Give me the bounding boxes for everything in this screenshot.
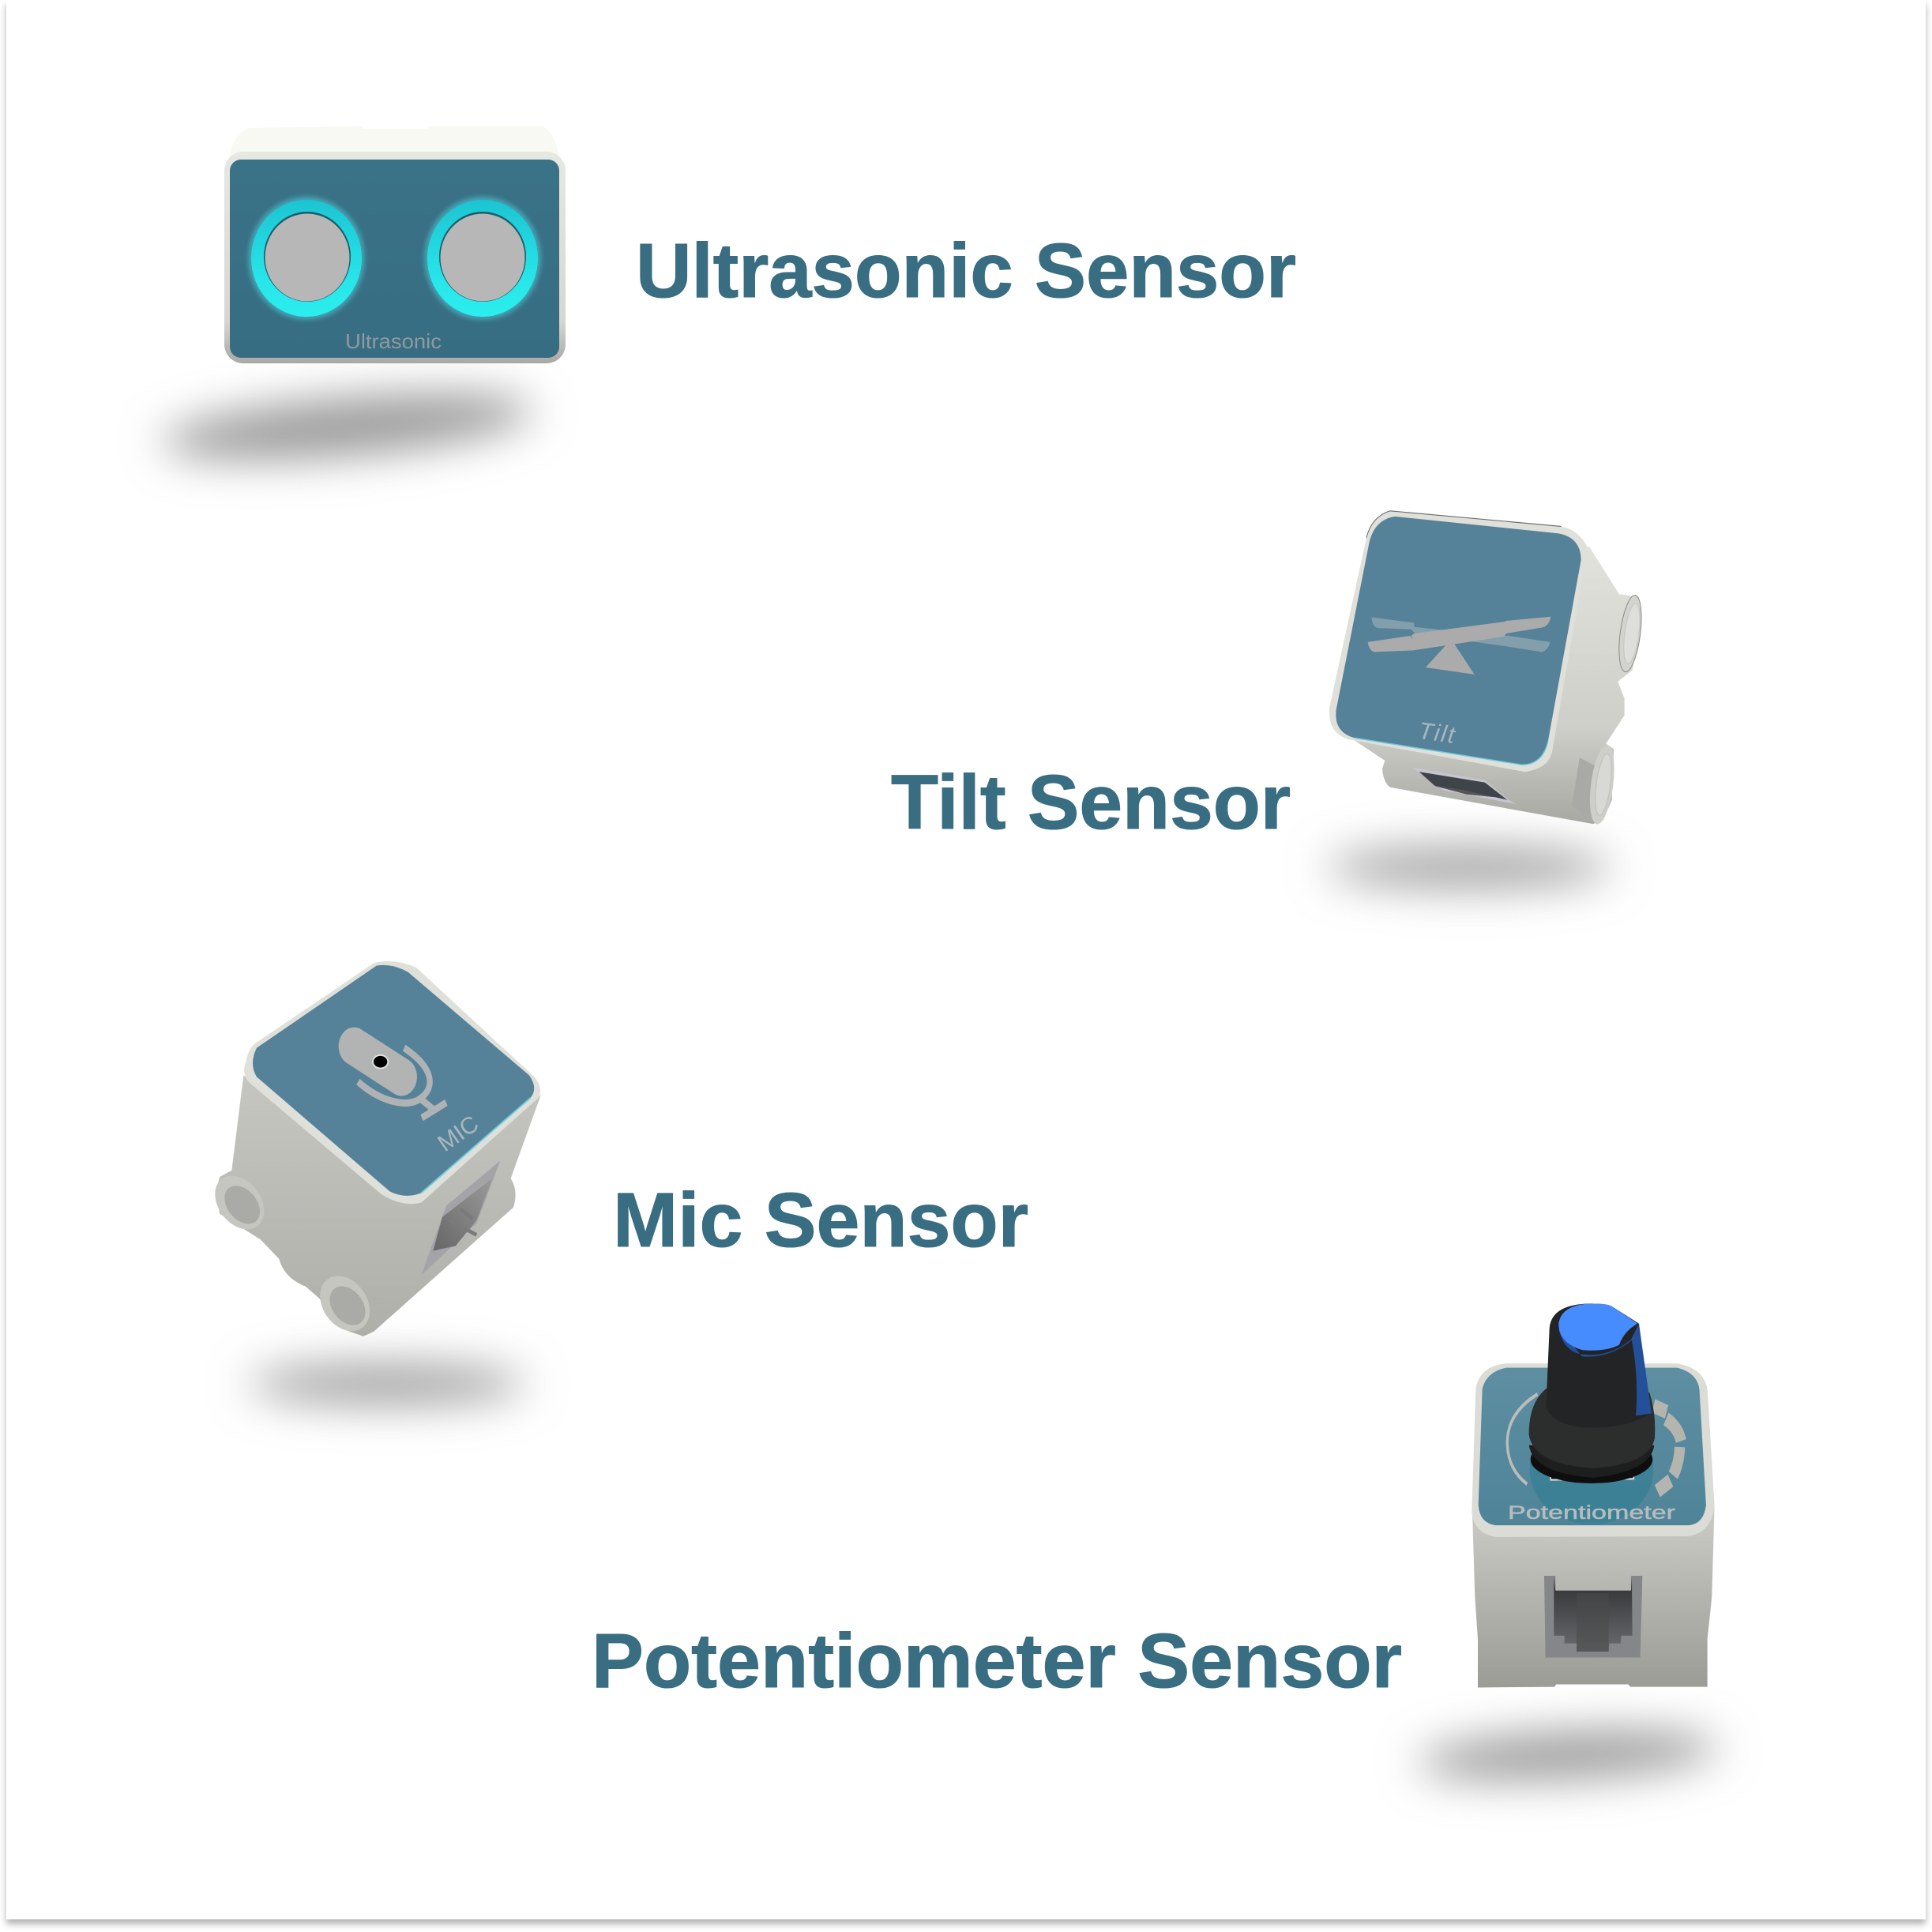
tilt sensor [1327,511,1645,888]
right transducer [424,197,541,320]
heading: potentiometer sensor: Potentiometer Sensor [592,1618,1402,1704]
heading: tilt sensor: Tilt Sensor [891,759,1291,845]
mic sensor [207,961,541,1404]
heading: mic sensor: Mic Sensor [613,1177,1028,1263]
shadow: ultrasonic [160,382,535,471]
ultrasonic face label: Ultrasonic [345,329,442,353]
mic face label: MIC [433,1111,483,1157]
ultrasonic sensor [160,126,566,471]
ultrasonic top housing [229,126,559,158]
tilt face label: Tilt [1417,718,1458,749]
ultrasonic teal panel [230,160,559,358]
left transducer [248,197,365,320]
tilt body drawing [1329,511,1645,825]
potentiometer sensor [1417,1303,1719,1787]
shadow: tilt [1327,847,1611,888]
ultrasonic face frame [224,152,566,363]
mic body drawing [207,961,541,1342]
potentiometer body drawing [1472,1303,1715,1687]
heading: ultrasonic sensor: Ultrasonic Sensor [636,227,1296,314]
potentiometer face label: Potentiometer [1508,1502,1675,1524]
shadow: mic [249,1363,525,1404]
shadow: potentiometer [1417,1723,1719,1787]
